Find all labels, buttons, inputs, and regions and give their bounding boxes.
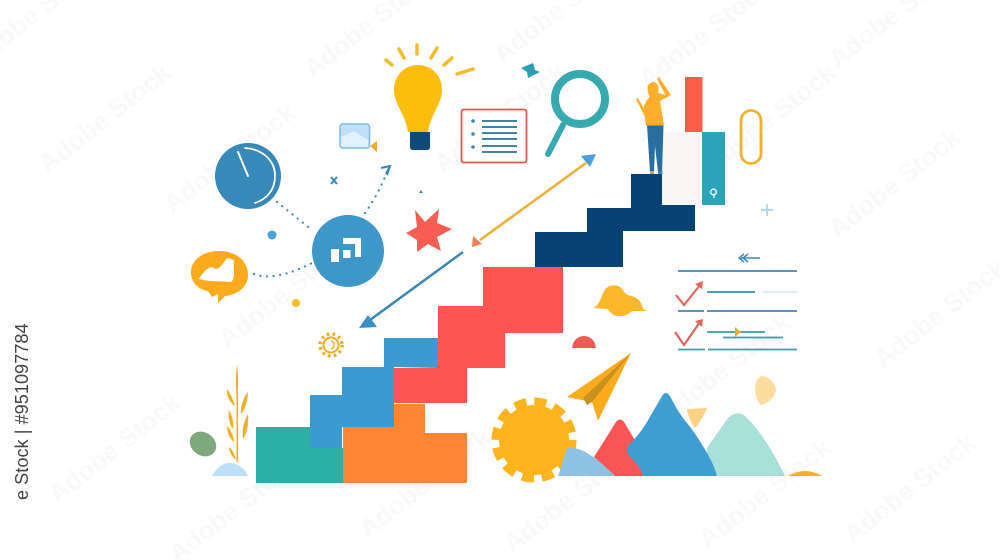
icon: pale blue dome	[212, 463, 248, 476]
icon: person on stairs	[636, 77, 671, 174]
bar: red	[685, 77, 702, 132]
icon: hourglass mark	[521, 63, 540, 78]
icon: speech bubble	[191, 251, 248, 303]
icon: pale yellow drop	[755, 376, 776, 405]
stairs: orange steps	[343, 404, 467, 483]
watermark pattern: Adobe Stock	[213, 232, 357, 354]
icon: checklist document	[462, 110, 526, 162]
watermark pattern: Adobe Stock	[428, 57, 572, 179]
icon: small triangle	[419, 190, 423, 193]
watermark pattern: Adobe Stock	[693, 432, 837, 554]
icon: dotted arrow head	[381, 166, 390, 175]
icon: red dome	[572, 336, 596, 348]
icon: small sun	[320, 334, 342, 356]
icon: paper plane	[567, 353, 631, 421]
icon: image card	[340, 124, 377, 152]
icon: chart circle	[312, 215, 384, 287]
icon: pale triangle	[687, 408, 707, 428]
stock id text: e Stock | #951097784	[12, 323, 32, 500]
watermark pattern: Adobe Stock	[353, 422, 497, 544]
watermark pattern: Adobe Stock	[33, 57, 177, 179]
watermark pattern: Adobe Stock	[498, 437, 642, 559]
bar: teal with key	[702, 132, 725, 205]
arrow: blue diagonal down	[359, 252, 463, 328]
watermark pattern: Adobe Stock	[838, 427, 982, 549]
icon: gear	[496, 402, 572, 478]
watermark pattern: Adobe Stock	[698, 57, 842, 179]
icon: light bulb	[386, 45, 473, 150]
icon: plus	[761, 204, 773, 216]
watermark pattern: Adobe Stock	[823, 122, 967, 244]
arrow: yellow diagonal up	[472, 154, 596, 247]
icon: clock circle	[215, 143, 281, 209]
icon: magnifying glass	[548, 74, 605, 154]
watermark pattern: Adobe Stock	[158, 97, 302, 219]
icon: wheat plant	[227, 364, 248, 462]
icon: paperclip	[741, 110, 761, 164]
mountains	[558, 393, 822, 476]
dotted connectors	[254, 172, 387, 276]
icon: blue dot	[268, 230, 276, 240]
panel: checklist	[675, 254, 797, 350]
icon: small x mark	[331, 177, 337, 184]
watermark pattern: Adobe Stock	[653, 307, 797, 429]
icon: green leaf	[185, 427, 221, 461]
stairs: teal base	[256, 427, 343, 483]
stairs: red steps	[394, 267, 563, 403]
stairs: blue steps	[310, 338, 438, 448]
icon: yellow dot	[292, 299, 300, 307]
watermark pattern: Adobe Stock	[43, 387, 187, 509]
panel: cream block	[662, 132, 702, 205]
icon: red star	[406, 209, 452, 252]
icon: yellow cloud	[593, 285, 647, 316]
stairs: navy steps	[535, 174, 695, 267]
